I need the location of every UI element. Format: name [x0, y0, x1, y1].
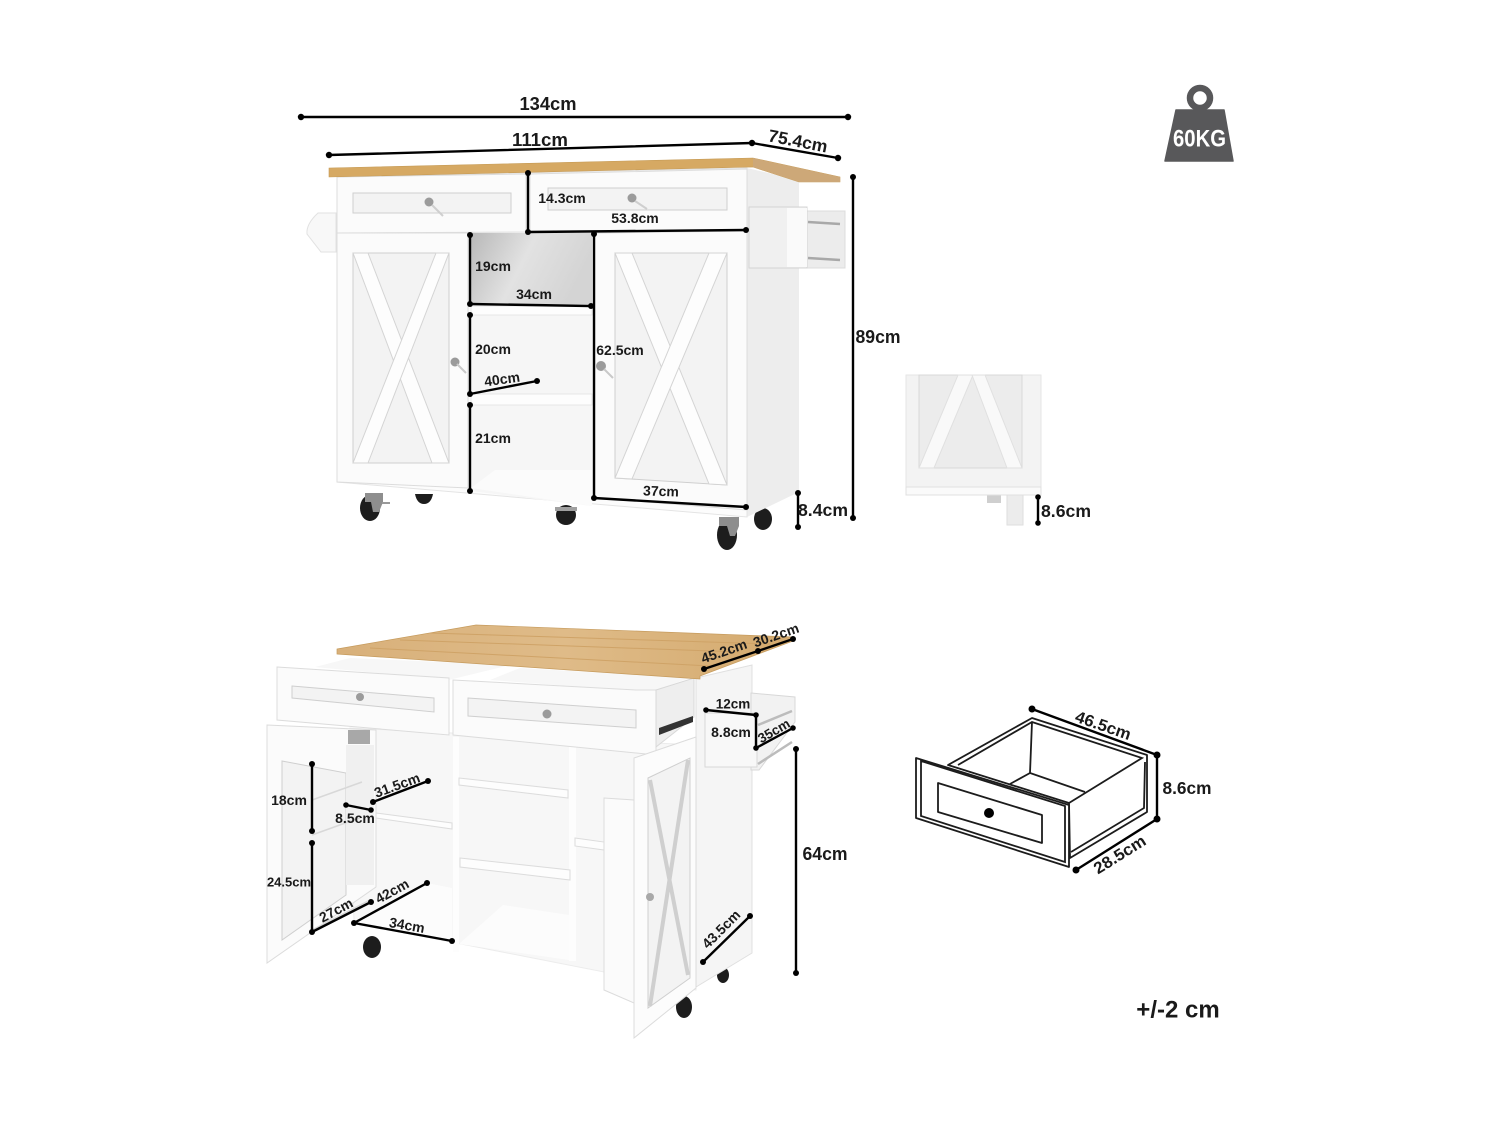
drawers — [337, 169, 747, 233]
cabinet front — [337, 168, 747, 517]
dimension: 62.5cm: 62.5cm — [596, 342, 644, 358]
dimension: 12cm — [703, 696, 759, 718]
left door, open — [267, 725, 376, 963]
dimension: 27cm — [312, 895, 374, 932]
dimension: 28.5cm — [1072, 819, 1157, 878]
dimension: 18cm — [271, 761, 315, 834]
dimension: 40cm — [470, 369, 540, 394]
panel: open view of kitchen island — [267, 625, 795, 1038]
dimension: 89cm: 89cm — [856, 327, 900, 347]
dimension: 20cm — [467, 312, 511, 397]
dimension: 30.2cm: 30.2cm — [751, 620, 801, 650]
dimension: 27cm: 27cm — [316, 895, 356, 925]
dimension: 134cm width: 134cm — [520, 94, 576, 114]
dimension: 8.6cm leg: 8.6cm — [1041, 501, 1091, 521]
icon: 60KG weight: 60KG — [1173, 126, 1226, 152]
dimension: 111cm — [326, 130, 755, 158]
dimension: 43.5cm — [699, 907, 753, 965]
dimension: 8.4cm: 8.4cm — [798, 500, 848, 520]
casters, open view — [363, 936, 729, 1018]
panel: leg detail — [906, 375, 1041, 525]
dimension: 8.8cm: 8.8cm — [711, 724, 751, 740]
dimension: 12cm: 12cm — [716, 696, 750, 712]
dimension: 45.2cm — [699, 636, 761, 672]
dimension: 8.5cm — [335, 802, 375, 826]
dimension: 64cm: 64cm — [802, 844, 848, 864]
dimension: 89cm — [850, 174, 900, 521]
countertop, open view — [337, 625, 793, 679]
dimension: 46.5cm: 46.5cm — [1073, 708, 1133, 744]
dimension: 134cm width — [298, 94, 851, 120]
cabinet side, open view — [696, 665, 752, 987]
dimension: 24.5cm: 24.5cm — [267, 874, 311, 890]
dimension: 8.6cm drawer: 8.6cm — [1162, 778, 1212, 798]
dimension: 37cm — [594, 482, 749, 510]
dimension: 53.8cm — [528, 210, 749, 233]
dimension: 18cm: 18cm — [271, 792, 307, 808]
dimension: 21cm — [467, 402, 511, 494]
right door — [595, 231, 747, 510]
casters, front view — [360, 493, 772, 550]
dimension: 45.2cm: 45.2cm — [699, 636, 749, 666]
left door — [337, 233, 468, 488]
dimension: 24.5cm — [267, 840, 315, 935]
dimension: 75.4cm — [752, 125, 841, 161]
dimension: 34cm floor width: 34cm — [388, 914, 426, 936]
dimension: 14.3cm — [525, 170, 586, 235]
dimension: 34cm shelf width: 34cm — [516, 286, 552, 302]
tolerance note: +/-2 cm — [1136, 996, 1220, 1024]
dimension: 28.5cm: 28.5cm — [1091, 832, 1149, 878]
dimension: 46.5cm — [1028, 706, 1160, 758]
towel rack and spice box — [749, 207, 845, 268]
dimension: 34cm floor width — [354, 914, 455, 944]
dimension: 8.5cm: 8.5cm — [335, 810, 375, 826]
drawer front — [916, 758, 1069, 867]
icon: 60KG weight — [1165, 88, 1233, 161]
panel: front view of kitchen island — [307, 158, 845, 550]
cabinet interior — [350, 728, 696, 990]
drawer box — [948, 718, 1147, 858]
dimension: 14.3cm: 14.3cm — [538, 190, 586, 206]
cabinet side — [747, 168, 799, 517]
dimension: 62.5cm — [591, 231, 644, 501]
dimension: 35cm: 35cm — [755, 716, 793, 746]
dimension: 64cm — [793, 746, 848, 976]
dimension: 53.8cm: 53.8cm — [611, 210, 659, 226]
dimension: 8.6cm leg — [1035, 494, 1091, 526]
dimension: 75.4cm: 75.4cm — [767, 125, 829, 157]
dimension: 31.5cm: 31.5cm — [372, 769, 422, 801]
dimension: 19cm — [467, 232, 511, 307]
dimension: 37cm: 37cm — [643, 482, 679, 500]
panel: drawer line drawing — [916, 718, 1147, 867]
dimension: 43.5cm: 43.5cm — [699, 907, 743, 951]
side knob — [307, 213, 336, 252]
dimension: 42cm — [351, 875, 430, 926]
dimension: 8.6cm drawer — [1154, 755, 1212, 822]
countertop — [329, 158, 840, 182]
drawers, open view — [277, 658, 694, 755]
dimension: 21cm: 21cm — [475, 430, 511, 446]
right door, open — [604, 737, 696, 1038]
towel rack, open view — [705, 693, 795, 770]
dimension: 34cm shelf width — [470, 286, 594, 309]
leg blocks — [987, 495, 1023, 525]
open shelves — [471, 233, 592, 506]
dimension: 19cm: 19cm — [475, 258, 511, 274]
dimension: 8.8cm — [711, 715, 759, 751]
dimension: 42cm: 42cm — [372, 875, 412, 907]
door corner — [906, 375, 1041, 495]
dimension: 8.4cm — [795, 490, 848, 530]
dimension: 40cm: 40cm — [483, 369, 521, 389]
dimension: 111cm: 111cm — [512, 130, 568, 150]
dimension: 20cm: 20cm — [475, 341, 511, 357]
